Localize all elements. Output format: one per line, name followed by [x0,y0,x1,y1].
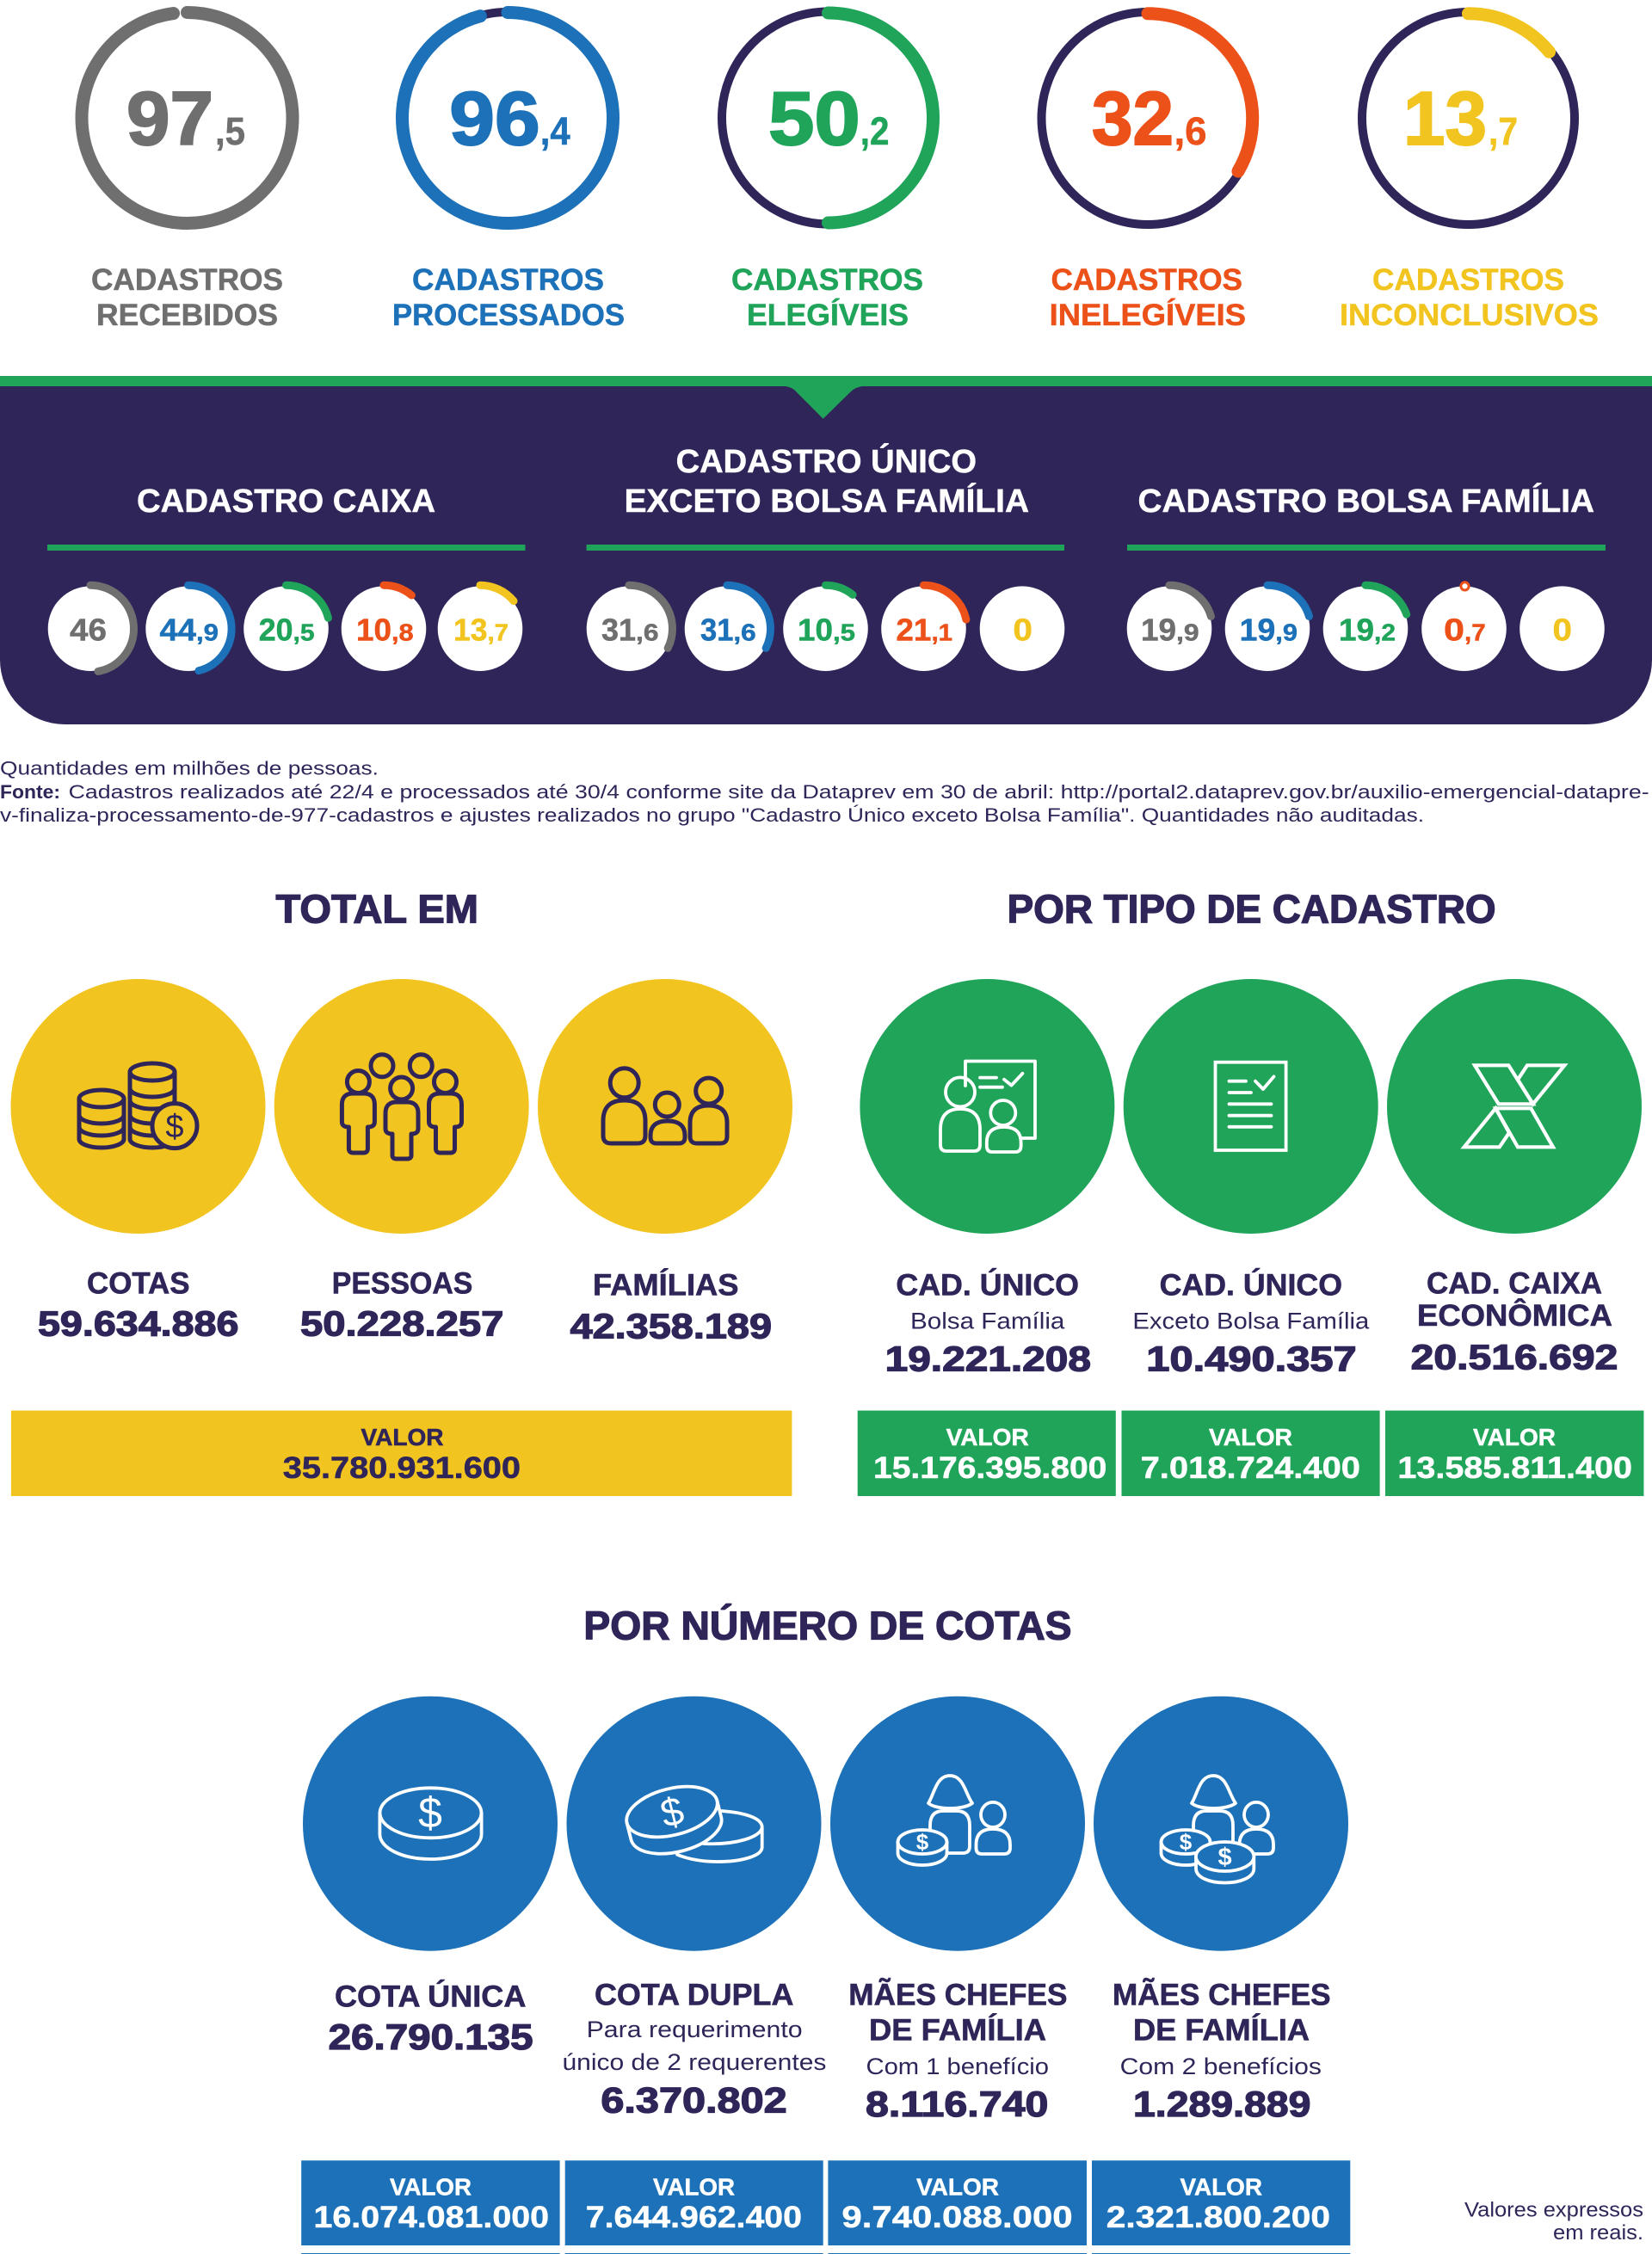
text block: source note [0,758,1649,826]
icon: coin stacks [79,1063,197,1149]
heading: total em: TOTAL EM [275,886,478,931]
value bar: cota dupla: 7.644.962.400 [586,2201,802,2234]
card: cotas: 59.634.886 [38,1304,238,1344]
value bar: cad único exceto: 7.018.724.400 [1141,1451,1360,1485]
group: cadastro único exceto bolsa família: 10 [798,613,833,647]
KPI: cadastros processados [392,12,625,332]
group: cadastro caixa [46,483,525,672]
card: cota dupla [563,1697,826,2120]
group: cadastro bolsa família [1125,482,1606,672]
KPI: cadastros inelegíveis: CADASTROS [1051,263,1242,297]
KPI: cadastros recebidos: 97 [126,76,213,161]
value bar: total [11,1411,792,1496]
value bar: cota única [301,2160,560,2254]
card: cota dupla: Para requerimento [587,2017,803,2042]
icon: caixa X logo [1464,1065,1564,1147]
group: cadastro único exceto bolsa família: EXCETO BOLSA FAMÍLIA [625,482,1029,520]
card: mães chefes com 1 benefício: Com 1 benefício [866,2054,1049,2079]
card: cad único bolsa família [860,979,1114,1378]
card: cad único exceto bolsa família: Exceto Bolsa Família [1132,1308,1370,1333]
card: famílias [538,979,792,1346]
text block: source note: Quantidades em milhões de pessoas. [0,758,379,779]
card: cad único bolsa família: 19.221.208 [885,1339,1091,1378]
icon: mother, child and coin: $ [916,1829,929,1855]
card: mães chefes com 1 benefício: 8.116.740 [866,2084,1048,2124]
card: pessoas: 50.228.257 [300,1304,503,1344]
value bar: cota dupla: VALOR [653,2173,735,2200]
icon: mother, child and coin [898,1776,1010,1865]
group: cadastro caixa: 20 [259,613,293,647]
card: mães chefes com 2 benefícios [1094,1697,1348,2124]
group: cadastro único exceto bolsa família: ,5 [833,619,855,645]
text block: source note: Cadastros realizados até 22/4 e processados até 30/4 conforme site da Dataprev em 30 de abril: http://portal2.dataprev.gov.br/auxilio-emergencial-datapre- [69,781,1649,803]
icon: people with form [940,1062,1035,1152]
group: cadastro único exceto bolsa família: ,1 [931,619,952,645]
group: cadastro único exceto bolsa família: 21 [896,613,931,647]
group: cadastro bolsa família: CADASTRO BOLSA FAMÍLIA [1137,482,1594,520]
KPI: cadastros recebidos: RECEBIDOS [96,299,278,332]
icon: family [603,1068,727,1143]
card: cad caixa econômica: 20.516.692 [1411,1337,1618,1376]
group: cadastro caixa: CADASTRO CAIXA [137,483,435,520]
value bar: cad único bolsa família [858,1411,1116,1496]
value bar: cad único bolsa família: VALOR [946,1424,1029,1450]
KPI: cadastros inconclusivos: CADASTROS [1372,263,1564,297]
group: cadastro único exceto bolsa família: 31 [700,613,733,647]
KPI: cadastros elegíveis: ELEGÍVEIS [747,298,909,332]
value bar: cota dupla [565,2160,823,2254]
card: cota dupla: 6.370.802 [601,2079,787,2120]
card: cad caixa econômica: CAD. CAIXA [1427,1267,1602,1301]
value bar: mães com 1 benefício [828,2160,1087,2254]
group: cadastro bolsa família: 19 [1141,613,1176,647]
value bar: cad único exceto [1122,1411,1380,1496]
card: famílias: 42.358.189 [570,1306,772,1346]
card: mães chefes com 2 benefícios: Com 2 benefícios [1120,2054,1322,2079]
card: cotas [10,979,265,1344]
card: cad único exceto bolsa família: CAD. ÚNICO [1160,1268,1342,1303]
KPI: cadastros inconclusivos [1340,12,1599,332]
KPI: cadastros recebidos: CADASTROS [91,263,283,297]
group: cadastro único exceto bolsa família: ,6 [733,619,756,645]
value bar: cad caixa: VALOR [1473,1424,1556,1450]
text block: source note: Fonte: [0,781,60,803]
card: cad único bolsa família: CAD. ÚNICO [896,1268,1079,1303]
value bar: mães com 1 benefício: VALOR [916,2173,999,2200]
icon: two coins: $ [656,1788,688,1836]
KPI: cadastros recebidos [82,12,293,332]
icon: checklist document [1215,1062,1286,1150]
icon: mother, child and two coins [1162,1776,1273,1882]
KPI: cadastros inconclusivos: INCONCLUSIVOS [1340,299,1599,332]
card: pessoas: PESSOAS [332,1267,472,1301]
heading: por tipo de cadastro: POR TIPO DE CADASTRO [1008,886,1496,931]
group: cadastro único exceto bolsa família [585,442,1064,672]
value bar: cad único exceto: VALOR [1209,1424,1292,1450]
group: cadastro caixa: ,5 [293,619,315,645]
card: cad único exceto bolsa família [1124,979,1378,1378]
group: cadastro caixa: 10 [356,613,391,647]
card: cota dupla: COTA DUPLA [595,1978,793,2011]
KPI: cadastros inelegíveis: ,6 [1174,109,1206,153]
card: mães chefes com 1 benefício: MÃES CHEFES [848,1978,1067,2011]
card: cota única: COTA ÚNICA [335,1979,526,2013]
group: cadastro caixa: ,7 [487,619,509,645]
group: cadastro único exceto bolsa família: CADASTRO ÚNICO [676,442,977,480]
value bar: total: VALOR [361,1424,444,1450]
value bar: total: 35.780.931.600 [283,1451,521,1485]
card: cotas: COTAS [87,1267,189,1301]
group: cadastro bolsa família: ,9 [1176,619,1199,645]
KPI: cadastros inconclusivos: 13 [1403,76,1487,161]
card: cad único exceto bolsa família: 10.490.357 [1146,1339,1357,1378]
panel: top KPI rings [82,12,1599,332]
KPI: cadastros recebidos: ,5 [215,109,245,153]
group: cadastro bolsa família: 0 [1444,613,1464,647]
icon: mother, child and two coins: $ [1180,1829,1193,1855]
card: cad caixa econômica: ECONÔMICA [1417,1298,1612,1333]
group: cadastro bolsa família: 19 [1240,613,1275,647]
KPI: cadastros elegíveis: ,2 [860,109,890,153]
card: mães chefes com 2 benefícios: 1.289.889 [1133,2084,1310,2124]
text block: source note: v-finaliza-processamento-de-977-cadastros e ajustes realizados no grupo "Cadastro Único exceto Bolsa Família". Quantidades não auditadas. [0,804,1424,826]
icon: two coins [621,1778,762,1863]
group: cadastro caixa: 44 [160,613,196,647]
icon: single coin [379,1788,482,1859]
group: cadastro caixa: 13 [453,613,487,647]
group: cadastro caixa: ,8 [391,619,414,645]
card: mães chefes com 1 benefício [830,1697,1085,2124]
card: mães chefes com 1 benefício: DE FAMÍLIA [869,2013,1046,2048]
KPI: cadastros elegíveis: CADASTROS [731,263,923,297]
text block: currency note: em reais. [1553,2221,1643,2245]
KPI: cadastros processados: CADASTROS [412,263,604,297]
text block: currency note: Valores expressos [1464,2199,1643,2222]
group: cadastro bolsa família: ,7 [1464,619,1486,645]
KPI: cadastros processados: 96 [449,76,540,161]
card: cota dupla: único de 2 requerentes [563,2049,826,2075]
group: cadastro bolsa família: ,9 [1275,619,1298,645]
KPI: cadastros processados: ,4 [540,109,570,153]
icon: mother, child and two coins: $ [1218,1844,1232,1871]
card: mães chefes com 2 benefícios: MÃES CHEFES [1113,1978,1331,2011]
card: mães chefes com 2 benefícios: DE FAMÍLIA [1133,2013,1310,2048]
card: pessoas [274,979,529,1344]
card: cota única [303,1697,558,2057]
group: cadastro bolsa família: 19 [1339,613,1374,647]
icon: single coin: $ [418,1789,442,1837]
text block: currency note [1464,2199,1643,2245]
group: cadastro caixa: ,9 [196,619,219,645]
value bar: mães com 2 benefícios: 2.321.800.200 [1106,2201,1330,2234]
group: cadastro caixa: 46 [70,613,107,647]
value bar: cad único bolsa família: 15.176.395.800 [873,1451,1106,1485]
value bar: cota única: 16.074.081.000 [313,2201,549,2234]
group: cadastro único exceto bolsa família: 0 [1013,613,1032,647]
KPI: cadastros processados: PROCESSADOS [392,299,625,332]
card: cad caixa econômica [1387,979,1642,1376]
KPI: cadastros inelegíveis: INELEGÍVEIS [1050,298,1246,332]
group: cadastro bolsa família: ,2 [1374,619,1396,645]
KPI: cadastros inconclusivos: ,7 [1489,109,1518,153]
icon: coin stacks: $ [165,1109,184,1145]
group: cadastro único exceto bolsa família: 31 [601,613,636,647]
card: famílias: FAMÍLIAS [593,1268,738,1303]
group: cadastro único exceto bolsa família: ,6 [636,619,659,645]
panel: breakdown by registry [0,376,1652,724]
KPI: cadastros inelegíveis: 32 [1092,76,1174,161]
card: cad único bolsa família: Bolsa Família [910,1308,1065,1333]
KPI: cadastros elegíveis [722,12,934,332]
value bar: cota única: VALOR [390,2173,472,2200]
value bar: mães com 2 benefícios: VALOR [1180,2173,1262,2200]
icon: group of people [342,1055,461,1159]
value bar: cad caixa: 13.585.811.400 [1397,1451,1632,1485]
value bar: mães com 1 benefício: 9.740.088.000 [841,2201,1073,2234]
group: cadastro bolsa família: 0 [1552,613,1572,647]
KPI: cadastros inelegíveis [1041,12,1254,332]
heading: por número de cotas: POR NÚMERO DE COTAS [583,1604,1072,1648]
KPI: cadastros elegíveis: 50 [768,76,860,161]
value bar: mães com 2 benefícios [1092,2160,1350,2254]
card: cota única: 26.790.135 [329,2017,533,2057]
value bar: cad caixa [1385,1411,1643,1496]
